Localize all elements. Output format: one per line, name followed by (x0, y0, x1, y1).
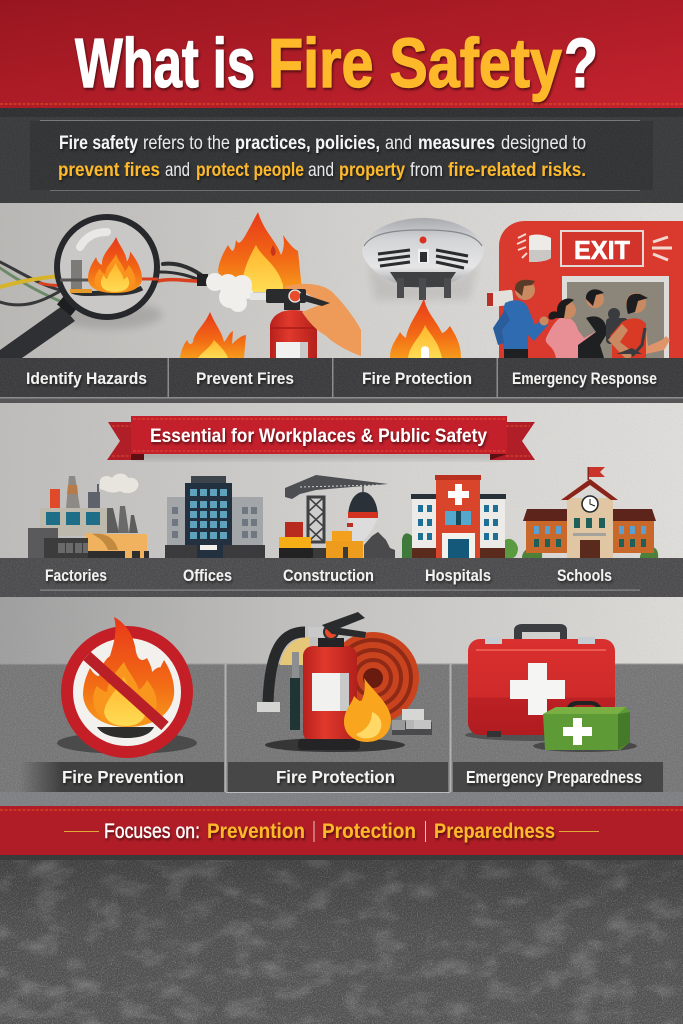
figure: man in black (578, 289, 628, 358)
icon: factory (28, 474, 149, 558)
text block: definition: protect people (196, 160, 304, 181)
label: Fire Protection: Fire Protection (276, 767, 395, 787)
ribbon banner: Essential for Workplaces & Public Safety (150, 426, 487, 447)
icon: extinguishing cloud (206, 273, 270, 312)
text block: definition: from (410, 160, 443, 181)
text block: definition: and (308, 160, 334, 181)
text block: definition: measures (418, 133, 495, 154)
icon: extinguisher and hose reel (257, 612, 432, 752)
text block: definition (58, 133, 586, 181)
icon: first aid kit (465, 624, 615, 741)
text block: definition: prevent fires (58, 160, 160, 181)
label: Fire Prevention: Fire Prevention (62, 767, 184, 787)
figure: runner in blue (487, 280, 548, 358)
panel: bottom concrete texture (0, 860, 683, 1024)
panel: emergency exit wall (499, 221, 683, 358)
title: ? (564, 24, 598, 102)
text: focuses on: Preparedness (434, 820, 555, 843)
exit sign: EXIT (574, 235, 630, 265)
label: Fire Protection: Fire Protection (362, 369, 472, 388)
figure: man in red (608, 293, 670, 358)
label: Construction: Construction (283, 567, 374, 585)
illustration: people evacuating (487, 280, 670, 358)
icon: small green kit (533, 701, 637, 752)
icon: school (522, 467, 658, 558)
panel: focus banner (0, 806, 683, 860)
figure: woman in pink (546, 298, 598, 358)
exit sign (561, 231, 643, 266)
panel: workplaces wall (0, 403, 683, 558)
panel: header band (0, 0, 683, 108)
text block: definition: and (165, 160, 190, 181)
label: Hospitals: Hospitals (425, 567, 491, 585)
panel: definition band (0, 108, 683, 203)
title: What is (75, 24, 255, 102)
label: Prevent Fires: Prevent Fires (196, 369, 294, 388)
text block: definition: refers to the (143, 133, 230, 154)
icon: extinguisher in hand (266, 284, 361, 358)
title: Fire Safety (268, 24, 562, 102)
label: Factories: Factories (45, 567, 107, 585)
label: Offices: Offices (183, 567, 232, 585)
icon: flame below detector (390, 298, 461, 358)
text block: definition: designed to (501, 133, 586, 154)
text: focuses on: Protection (322, 820, 416, 843)
text block: definition: and (385, 133, 412, 154)
panel: workplace labels strip (0, 558, 683, 597)
text block: definition: practices, policies, (235, 133, 380, 154)
icon: large flame (218, 212, 302, 292)
illustration: wires (0, 262, 208, 305)
title (75, 24, 598, 102)
doorway (562, 276, 669, 358)
icon: smoke detector (362, 218, 484, 300)
panel: four actions wall (0, 203, 683, 358)
text block: definition: fire-related risks. (448, 160, 586, 181)
text block: definition: property (339, 160, 405, 181)
label: Identify Hazards: Identify Hazards (26, 369, 147, 388)
panel: action labels strip (0, 358, 683, 404)
bricks (392, 709, 432, 735)
icon: alarm (517, 234, 672, 262)
label: Schools: Schools (557, 567, 612, 585)
icon: small flame (180, 312, 246, 358)
ribbon banner (107, 416, 535, 460)
icon: office tower (165, 476, 265, 558)
label: Emergency Preparedness: Emergency Preparedness (466, 767, 642, 787)
panel: focus areas floor (0, 597, 683, 806)
hose reel (327, 632, 419, 724)
text: focuses on (104, 820, 555, 843)
icon: hospital (402, 475, 518, 558)
icon: magnifying glass over faulty wiring (0, 217, 162, 358)
text: focuses on: Prevention (207, 820, 305, 843)
icon: construction site (279, 475, 395, 558)
text: focuses on: Focuses on: (104, 820, 200, 843)
text block: definition: Fire safety (59, 133, 138, 154)
icon: no fire sign (57, 617, 197, 754)
